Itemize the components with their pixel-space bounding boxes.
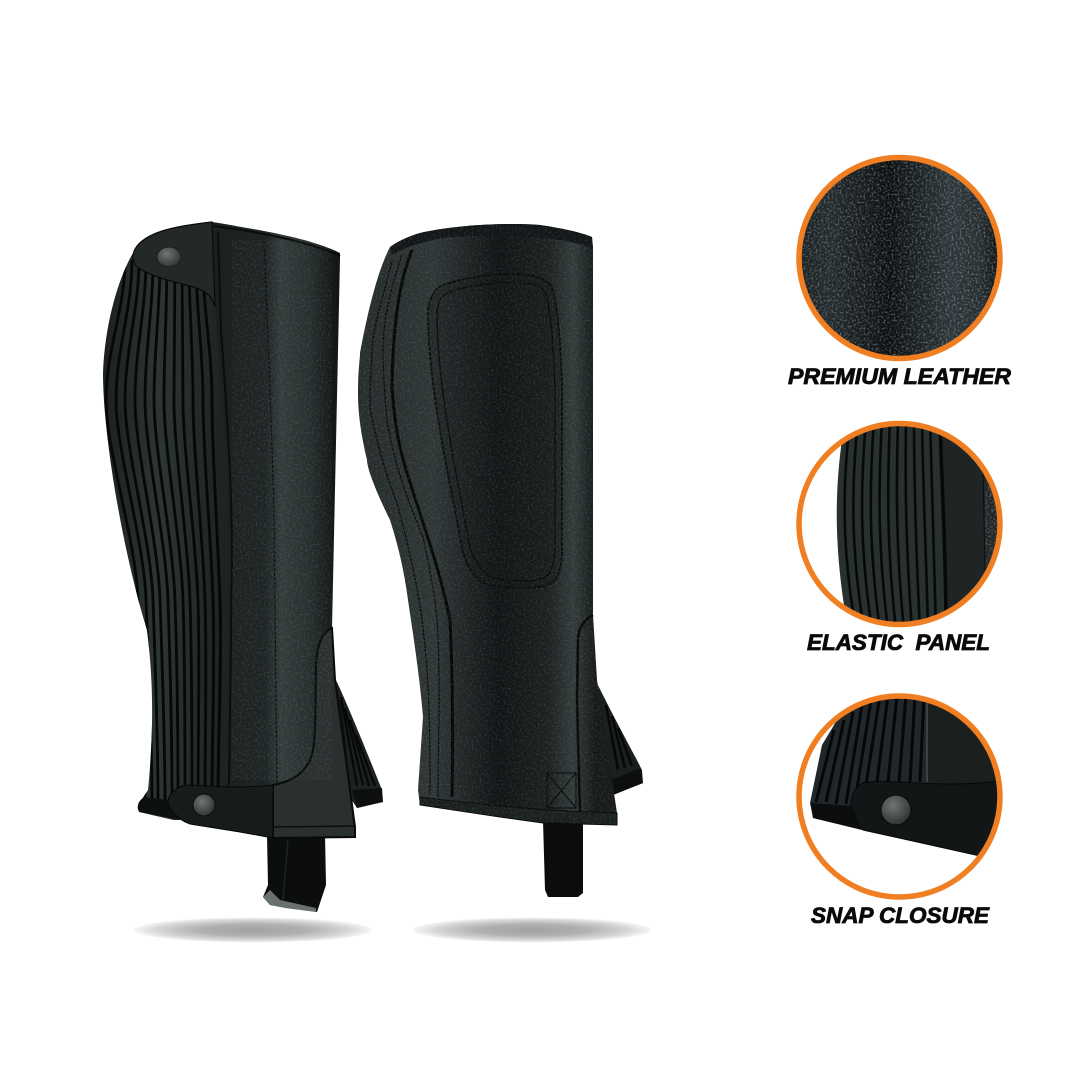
circle: snap close-up bbox=[799, 695, 1005, 897]
ankle flap seam bbox=[577, 615, 593, 813]
main leather body bbox=[358, 224, 617, 825]
circle: leather close-up bbox=[796, 155, 1004, 362]
bottom hem bbox=[420, 797, 617, 825]
stitched seams bbox=[214, 226, 340, 785]
snap strap bbox=[168, 785, 273, 838]
reinforcement box stitch bbox=[547, 773, 576, 808]
leather grain overlay bbox=[232, 225, 620, 825]
knee pad stitching bbox=[428, 274, 562, 588]
top snap tab bbox=[133, 222, 215, 307]
ground shadow: right chap bbox=[413, 918, 651, 942]
strap under right chap bbox=[543, 820, 583, 897]
ground shadow: left chap bbox=[134, 918, 372, 942]
strap under left chap bbox=[263, 835, 326, 912]
strap snap stud bbox=[193, 794, 215, 816]
ankle flap bbox=[273, 628, 355, 838]
side stitched channels bbox=[370, 250, 453, 797]
label: premium leather: PREMIUM LEATHER bbox=[788, 364, 1011, 389]
product: right half chap, inner view bbox=[358, 224, 643, 897]
feature: snap closure bbox=[799, 695, 1005, 928]
top snap stud bbox=[157, 247, 181, 267]
feature: premium leather bbox=[788, 155, 1011, 389]
snap strap close-up bbox=[851, 782, 1005, 856]
product: left half chap, outer view bbox=[100, 220, 383, 912]
bottom binding bbox=[138, 797, 180, 820]
feature: elastic panel bbox=[799, 420, 1010, 655]
circle: elastic close-up bbox=[799, 420, 1010, 630]
elastic side panel with ribs bbox=[100, 220, 235, 820]
rear elastic gusset bbox=[598, 685, 643, 795]
label: elastic panel: ELASTIC PANEL bbox=[807, 630, 990, 655]
label: snap closure: SNAP CLOSURE bbox=[811, 903, 990, 928]
top binding bbox=[390, 224, 593, 255]
leather front panel bbox=[212, 222, 355, 838]
rear elastic gusset bbox=[336, 680, 383, 808]
